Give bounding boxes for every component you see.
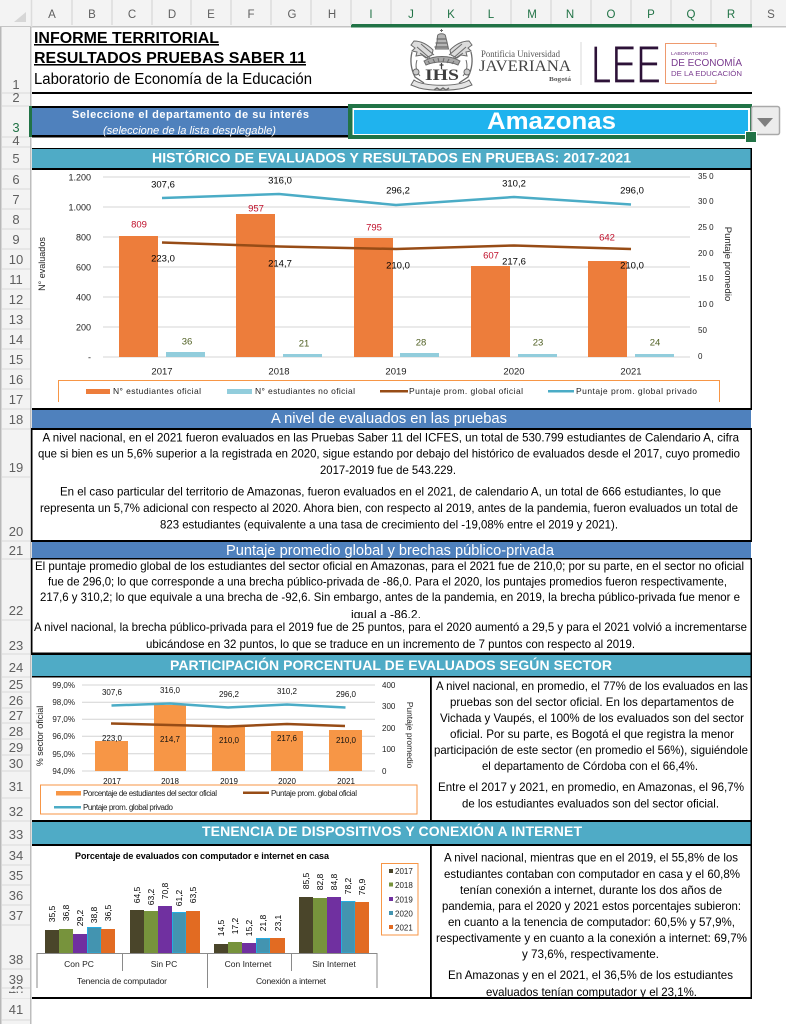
data labels: 84,8 <box>329 873 339 890</box>
x axis: 2020 <box>278 777 296 786</box>
spreadsheet row header: 18 <box>9 412 23 427</box>
spreadsheet row header: 17 <box>9 392 23 407</box>
text block: tenencia: tenían conexión a internet, durante los dos años de <box>460 883 722 897</box>
selected department cell: Amazonas: Amazonas <box>487 108 616 135</box>
text block: evaluados: En el caso particular del territorio de Amazonas, fueron evaluados en el 2021, de calendario A, un total de 666 estudiantes, lo que <box>60 484 721 498</box>
left axis: N° evaluados <box>37 237 47 291</box>
spreadsheet column header <box>0 0 786 28</box>
spreadsheet row header: 19 <box>9 460 23 475</box>
data labels: 210,0 <box>336 736 357 745</box>
right axis: Puntaje promedio <box>722 227 733 301</box>
data labels: 29,2 <box>75 909 85 926</box>
text block: participacion: el departamento de Córdoba con el 66,4%. <box>482 759 698 773</box>
data labels <box>47 872 367 936</box>
spreadsheet row header: 40 <box>9 983 23 998</box>
bars: 2018 <box>59 898 327 953</box>
data labels: 217,6 <box>502 256 526 268</box>
heading: puntaje promedio: Puntaje promedio global y brechas público-privada <box>226 542 555 559</box>
left axis: 1.000 <box>68 202 91 212</box>
left axis: 94,0% <box>52 767 75 776</box>
right axis: 200 <box>382 724 396 733</box>
data labels: 36 <box>182 336 192 348</box>
title: INFORME TERRITORIAL <box>34 30 219 47</box>
text block: participacion: participación de este sector (en promedio el 56%), siguiéndole <box>434 743 748 757</box>
left axis <box>37 172 91 362</box>
spreadsheet row header: 27 <box>9 708 23 723</box>
category axis <box>37 953 377 988</box>
data labels: 210,0 <box>386 260 410 272</box>
title: RESULTADOS PRUEBAS SABER 11 <box>34 50 306 67</box>
logo: LEE Laboratorio de Economia de la Educacion <box>591 35 742 95</box>
text block: participacion: oficial. Por su parte, es Bogotá el que registra la menor <box>450 727 734 741</box>
line: puntaje privado <box>162 194 631 205</box>
data labels: 23,1 <box>273 914 283 931</box>
heading: a nivel de evaluados: A nivel de evaluados en las pruebas <box>271 410 507 427</box>
legend: N° estudiantes no oficial <box>255 386 355 396</box>
bars: 2021 <box>101 902 369 953</box>
legend <box>58 380 720 402</box>
heading: historico: HISTÓRICO DE EVALUADOS Y RESULTADOS EN PRUEBAS: 2017-2021 <box>152 148 631 166</box>
logo: LEE Laboratorio de Economia de la Educacion: LEE <box>591 35 661 95</box>
data labels: 70,8 <box>160 882 170 899</box>
logo: Pontificia Universidad Javeriana <box>411 29 582 90</box>
x axis: 2021 <box>620 366 642 378</box>
text block: evaluados: que si bien es un 5,6% superior a la registrada en 2020, sigue estando por debajo del histórico de evaluados desde el 2017, cuyo promedio <box>38 446 740 460</box>
category axis: Conexión a internet <box>256 976 327 986</box>
line: puntaje oficial <box>162 242 631 249</box>
data labels: 17,2 <box>230 917 240 934</box>
selector label band: Seleccione el departamento de su interés <box>72 109 309 121</box>
data labels: 214,7 <box>268 258 292 270</box>
logo: Pontificia Universidad Javeriana: Pontificia Universidad <box>481 49 560 59</box>
spreadsheet row header: 1 <box>12 77 20 92</box>
data labels: 210,0 <box>219 736 240 745</box>
logo: LEE Laboratorio de Economia de la Educacion: LABORATORIO <box>671 51 709 56</box>
spreadsheet row header: 22 <box>9 603 23 618</box>
spreadsheet column header: A <box>48 9 56 21</box>
legend: Puntaje prom. global privado <box>576 386 697 396</box>
text block: participacion: A nivel nacional, en promedio, el 77% de los evaluados en las <box>436 679 748 693</box>
spreadsheet row header: 9 <box>12 232 20 247</box>
legend: 2017 <box>395 867 413 876</box>
right axis: 30 0 <box>698 197 714 206</box>
data labels: 296,2 <box>219 690 240 699</box>
left wing and keys <box>411 41 433 58</box>
data labels: 61,2 <box>174 889 184 906</box>
spreadsheet row header: 16 <box>9 372 23 387</box>
bars: 2019 <box>73 897 341 953</box>
spreadsheet column header: R <box>727 9 735 21</box>
line: puntaje oficial <box>111 724 345 726</box>
x axis <box>151 366 642 378</box>
panel: tenencia chart <box>32 822 752 999</box>
spreadsheet row header: 33 <box>9 827 23 842</box>
spreadsheet row header: 25 <box>9 677 23 692</box>
spreadsheet row header: 39 <box>9 972 23 987</box>
data labels: 223,0 <box>151 254 175 264</box>
spreadsheet column header: N <box>566 9 574 21</box>
legend: Porcentaje de estudiantes del sector oficial <box>83 789 217 798</box>
left axis: 1.200 <box>68 172 91 182</box>
data labels: 63,2 <box>146 888 156 905</box>
x axis: 2017 <box>151 366 173 378</box>
legend: Puntaje prom. global oficial <box>409 386 523 396</box>
legend: 2020 <box>395 910 413 918</box>
data labels: 316,0 <box>268 176 292 186</box>
text block: evaluados: A nivel nacional, en el 2021 fueron evaluados en las Pruebas Saber 11 del ICFES, un total de 530.799 estudiantes de Calendario A, cifra <box>42 430 739 444</box>
text block: participacion: Vichada y Vaupés, el 100% de los evaluados son del sector <box>440 711 744 725</box>
data labels: 296,0 <box>336 690 357 699</box>
text block: brechas: El puntaje promedio global de los estudiantes del sector oficial en Amazonas, para el 2021 fue de 210,0; por su parte, en el sector no oficial <box>35 559 744 573</box>
legend: Puntaje prom. global oficial <box>271 789 357 798</box>
heading: a nivel de evaluados <box>32 410 751 428</box>
spreadsheet column header: K <box>447 9 455 21</box>
data labels: 76,9 <box>357 878 367 895</box>
spreadsheet row header: 10 <box>9 252 23 267</box>
x axis: 2017 <box>103 777 121 786</box>
bars: porcentaje sector oficial <box>95 705 362 771</box>
heading: participacion <box>32 655 751 676</box>
right axis: 0 <box>698 352 703 361</box>
right axis: 10 0 <box>698 300 714 309</box>
heading: historico <box>32 148 751 168</box>
legend <box>382 864 418 935</box>
selector label band: (seleccione de la lista desplegable) <box>103 125 276 137</box>
spreadsheet column header: O <box>607 9 616 21</box>
x axis: 2020 <box>503 366 525 378</box>
left axis: 97,0% <box>52 715 75 724</box>
spreadsheet row header: 15 <box>9 352 23 367</box>
heading: participacion: PARTICIPACIÓN PORCENTUAL DE EVALUADOS SEGÚN SECTOR <box>170 656 612 673</box>
spreadsheet row header: 34 <box>9 848 23 863</box>
text block: tenencia: respectivamente y en cuanto a la conexión a internet: 69,7% <box>436 931 747 945</box>
spreadsheet row header: 5 <box>12 151 20 166</box>
spreadsheet row header: 41 <box>9 1002 23 1017</box>
left axis: 400 <box>76 292 91 302</box>
spreadsheet row header: 29 <box>9 740 23 755</box>
category axis: Sin PC <box>151 959 177 969</box>
data labels: 307,6 <box>102 688 123 697</box>
data labels: 36,8 <box>61 904 71 921</box>
heading: tenencia <box>32 822 751 844</box>
spreadsheet row header: 24 <box>9 660 23 675</box>
heading: tenencia: TENENCIA DE DISPOSITIVOS Y CONEXIÓN A INTERNET <box>202 822 582 839</box>
data labels: 642 <box>599 232 615 244</box>
text block: brechas: fue de 296,0; lo que corresponde a una brecha público-privada de -86,0. Para el 2020, los puntajes promedios fueron respectivamente, <box>48 574 727 588</box>
logo: LEE Laboratorio de Economia de la Educacion: DE ECONOMÍA <box>671 56 742 69</box>
right axis <box>698 172 733 361</box>
right axis: 20 0 <box>698 249 714 258</box>
data labels: 307,6 <box>151 180 175 190</box>
spreadsheet column header: I <box>369 9 373 21</box>
spreadsheet row header: 8 <box>12 212 20 227</box>
text block: evaluados: 2017-2019 fue de 543.229. <box>320 463 456 477</box>
spreadsheet row header: 35 <box>9 868 23 883</box>
spreadsheet row header: 23 <box>9 638 23 653</box>
heading: puntaje promedio <box>32 542 751 559</box>
legend: 2018 <box>395 881 413 890</box>
data labels: 85,5 <box>301 872 311 889</box>
spreadsheet row header: 4 <box>12 133 20 148</box>
spreadsheet column header: Q <box>687 9 696 21</box>
data labels: 38,8 <box>89 906 99 923</box>
text block: participacion <box>434 679 748 810</box>
x axis: 2018 <box>268 366 290 378</box>
data labels: 310,2 <box>502 178 526 190</box>
spreadsheet row header: 31 <box>9 779 23 794</box>
title <box>34 30 312 88</box>
legend: N° estudiantes oficial <box>113 386 201 396</box>
x axis: 2019 <box>385 366 407 378</box>
spreadsheet column header: G <box>288 9 297 21</box>
data labels: 296,2 <box>386 186 410 196</box>
data labels: 607 <box>483 250 499 262</box>
data labels: 809 <box>131 220 147 230</box>
text block: brechas: A nivel nacional, la brecha público-privada para el 2019 fue de 25 puntos, para el 2020 aumentó a 29,5 y para el 2021 volvió a incrementarse <box>34 620 747 634</box>
text block: evaluados: 823 estudiantes (equivalente a una tasa de crecimiento del -19,08% entre el 2019 y 2021). <box>160 518 618 532</box>
left axis: 200 <box>76 322 91 332</box>
spreadsheet column header: L <box>488 9 495 21</box>
side scrolls <box>411 52 472 83</box>
data labels: 214,7 <box>160 735 181 744</box>
legend <box>40 785 417 814</box>
data labels: 36,5 <box>103 904 113 921</box>
spreadsheet row header: 7 <box>12 192 20 207</box>
left axis: - <box>88 352 91 362</box>
spreadsheet column header: H <box>328 9 336 21</box>
right axis <box>382 681 415 776</box>
data labels: 24 <box>650 338 660 348</box>
left axis <box>35 681 75 776</box>
data labels: 63,5 <box>188 886 198 903</box>
category axis: Tenencia de computador <box>77 976 167 986</box>
spreadsheet row header: 36 <box>9 888 23 903</box>
right axis: 300 <box>382 702 396 711</box>
spreadsheet row header: 28 <box>9 724 23 739</box>
right axis: Puntaje promedio <box>405 702 415 769</box>
text block: tenencia: A nivel nacional, mientras que en el 2019, el 55,8% de los <box>444 850 738 864</box>
spreadsheet row header: 37 <box>9 908 23 923</box>
tiara <box>436 29 448 49</box>
spreadsheet column header: E <box>207 9 215 21</box>
chart title: Porcentaje de evaluados con computador e internet en casa <box>75 851 330 861</box>
spreadsheet row header: 21 <box>9 543 23 558</box>
right axis: 50 <box>698 326 707 335</box>
x axis <box>103 777 355 786</box>
text block: participacion: Entre el 2017 y 2021, en promedio, en Amazonas, el 96,7% <box>438 780 744 794</box>
text block: tenencia: estudiantes contaban con computador en casa y el 60,8% <box>444 867 740 881</box>
legend: Puntaje prom. global privado <box>83 803 174 812</box>
data labels <box>131 176 660 350</box>
data labels: 795 <box>366 222 382 234</box>
left axis: 96,0% <box>52 732 75 741</box>
data labels: 28 <box>416 338 426 348</box>
spreadsheet row header: 14 <box>9 332 23 347</box>
text block: tenencia: En Amazonas y en el 2021, el 36,5% de los estudiantes <box>448 968 733 982</box>
line: puntaje privado <box>112 704 346 708</box>
text block: brechas: igual a -86.2. <box>351 608 421 622</box>
right wing and keys <box>450 41 472 58</box>
spreadsheet column header: C <box>128 9 136 21</box>
spreadsheet column header: B <box>88 9 96 21</box>
ribbon <box>411 80 472 90</box>
spreadsheet row header: 11 <box>9 272 23 287</box>
data labels: 217,6 <box>277 734 298 743</box>
spreadsheet row header: 26 <box>9 693 23 708</box>
data labels: 296,0 <box>620 186 644 196</box>
spreadsheet column header: M <box>527 9 537 21</box>
text block: evaluados <box>31 428 752 542</box>
left axis: 98,0% <box>52 698 75 707</box>
spreadsheet row header: 20 <box>9 524 23 539</box>
spreadsheet row header: 32 <box>9 804 23 819</box>
text block: brechas <box>31 558 752 655</box>
spreadsheet row header: 38 <box>9 952 23 967</box>
data labels: 78,2 <box>343 877 353 894</box>
logo: Pontificia Universidad Javeriana: JAVERIANA <box>479 58 572 75</box>
spreadsheet row header <box>0 27 32 1024</box>
data labels: 21 <box>299 338 309 350</box>
spreadsheet row header: 2 <box>12 90 20 105</box>
left axis: 800 <box>76 232 91 242</box>
panel: historic chart <box>32 149 752 410</box>
text block: tenencia: evaluados tenían computador y el 23,1%. <box>486 985 697 999</box>
right axis: 15 0 <box>698 274 714 283</box>
spreadsheet column header: D <box>168 9 176 21</box>
spreadsheet column header: S <box>767 9 775 21</box>
text block: participacion: pruebas son del sector oficial. En los departamentos de <box>450 695 734 709</box>
spreadsheet column header: P <box>647 9 655 21</box>
data labels: 35,5 <box>47 905 57 922</box>
data labels: 82,8 <box>315 873 325 890</box>
left axis: 600 <box>76 262 91 272</box>
data labels: 316,0 <box>160 686 181 695</box>
right axis: 400 <box>382 681 396 690</box>
category axis: Con Internet <box>225 959 272 969</box>
laurel band <box>424 56 460 65</box>
left axis: 95,0% <box>52 750 75 759</box>
spreadsheet row header: 30 <box>9 756 23 771</box>
text block: tenencia <box>436 850 747 999</box>
x axis: 2021 <box>337 777 355 786</box>
right axis: 0 <box>382 767 387 776</box>
spreadsheet row header: 13 <box>9 312 23 327</box>
logo: Pontificia Universidad Javeriana: IHS <box>425 67 459 84</box>
spreadsheet row header: 6 <box>12 172 20 187</box>
spreadsheet column header: J <box>408 9 414 21</box>
right axis: 35 0 <box>698 172 714 181</box>
x axis: 2018 <box>161 777 179 786</box>
text block: brechas: 217,6 y 310,2; lo que equivale a una brecha de -92,6. Sin embargo, antes de la pandemia, en 2019, la brecha público-privada fue menor e <box>40 590 740 604</box>
bars: 2020 <box>87 901 355 953</box>
data labels: 64,5 <box>132 886 142 903</box>
left axis: % sector oficial <box>35 706 45 766</box>
data labels: 23 <box>533 338 543 348</box>
spreadsheet row header: 12 <box>9 292 23 307</box>
spreadsheet row header: 3 <box>12 120 20 135</box>
bars: no oficial <box>166 352 674 357</box>
data labels: 957 <box>248 204 264 214</box>
data labels: 223,0 <box>102 734 123 743</box>
title: Laboratorio de Economía de la Educación <box>34 71 312 88</box>
data labels: 21,8 <box>258 914 268 931</box>
left axis: 99,0% <box>52 681 75 690</box>
text block: tenencia: y 73,6%, respectivamente. <box>522 947 659 961</box>
data labels: 14,5 <box>216 919 226 936</box>
data labels: 210,0 <box>620 260 644 272</box>
icon: dropdown button <box>745 106 780 143</box>
data labels <box>102 686 357 745</box>
x axis: 2019 <box>220 777 238 786</box>
spreadsheet column header: F <box>247 9 255 21</box>
text block: evaluados: representa un 5,7% adicional con respecto al 2020. Ahora bien, con respecto al 2019, antes de la pandemia, fueron evaluados un total de <box>40 501 738 515</box>
right axis: 100 <box>382 745 396 754</box>
text block: brechas: ubicándose en 32 puntos, lo que se traduce en un incremento de 7 puntos con respecto al 2019. <box>146 637 635 651</box>
text block: participacion: de los estudiantes evaluados son del sector oficial. <box>462 796 719 810</box>
panel: participacion chart <box>32 655 752 822</box>
legend: 2021 <box>395 924 413 932</box>
data labels: 310,2 <box>277 687 298 696</box>
legend: 2019 <box>395 896 413 904</box>
logo: Pontificia Universidad Javeriana: Bogotá <box>549 76 572 83</box>
category axis: Con PC <box>64 959 94 969</box>
category axis: Sin Internet <box>312 959 356 969</box>
logo: LEE Laboratorio de Economia de la Educacion: DE LA EDUCACIÓN <box>671 69 742 78</box>
text block: tenencia: pandemia, para el 2020 y 2021 estos porcentajes subieron: <box>442 899 741 913</box>
bars: 2017 <box>45 897 313 953</box>
text block: tenencia: en cuanto a la tenencia de computador: 60,5% y 57,9%, <box>448 915 735 929</box>
data labels: 15,2 <box>244 919 254 936</box>
bars: oficial <box>119 214 627 357</box>
selected department cell: Amazonas <box>348 104 752 139</box>
right axis: 25 0 <box>698 223 714 232</box>
selector label band <box>29 106 350 138</box>
